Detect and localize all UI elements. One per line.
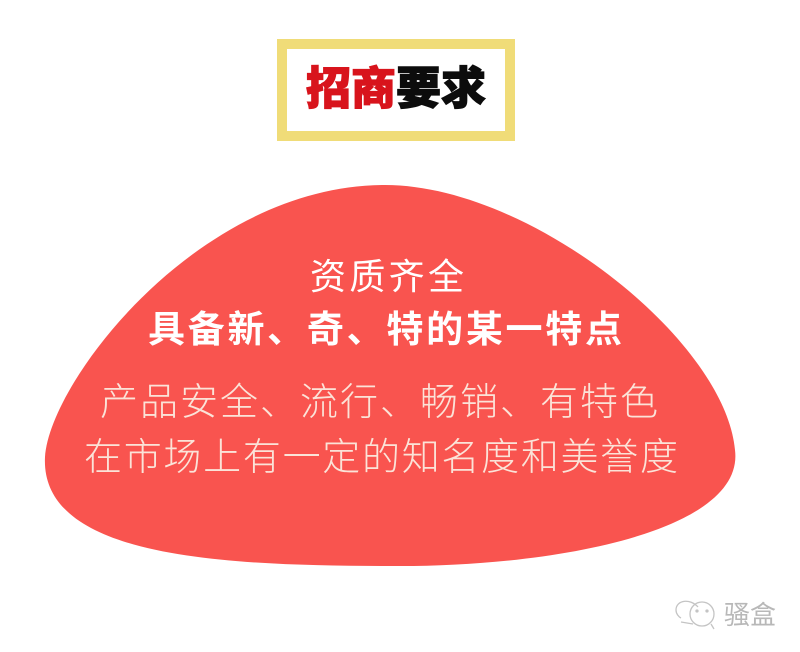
title text: 招商要求 [306,63,486,114]
heading: qualification: 资质齐全 [310,256,464,297]
panel: red blob [45,185,735,566]
watermark [676,600,776,630]
title box [282,44,510,136]
text: brand reputation: 在市场上有一定的知名度和美誉度 [84,437,678,479]
watermark text: 骚盒 [724,600,776,630]
text: product requirements: 产品安全、流行、畅销、有特色 [100,382,658,424]
icon: chat bubbles [676,601,714,629]
heading: unique feature: 具备新、奇、特的某一特点 [148,309,622,350]
